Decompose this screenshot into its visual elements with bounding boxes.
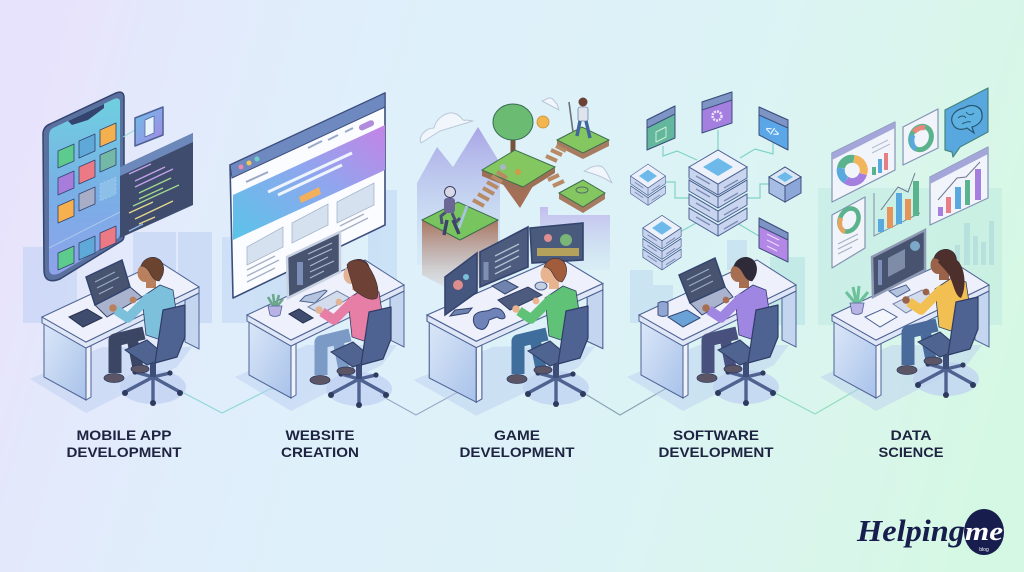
skyline right block bbox=[770, 257, 805, 325]
app icons bbox=[58, 123, 116, 270]
game controller bbox=[473, 308, 505, 329]
donut card bbox=[903, 109, 938, 165]
island: lower right bbox=[559, 180, 605, 213]
keyboard bbox=[893, 290, 935, 313]
panel: game development bbox=[414, 98, 612, 416]
skyline backdrop bbox=[540, 207, 610, 270]
panel: website creation bbox=[222, 93, 404, 411]
line and bar chart card bbox=[930, 147, 988, 225]
laptop bbox=[679, 258, 733, 315]
skyline backdrop bbox=[23, 232, 212, 323]
label: software development: SOFTWARE bbox=[673, 427, 759, 443]
report document bbox=[832, 197, 865, 268]
app tile icon bbox=[123, 107, 163, 146]
tablet bbox=[668, 310, 700, 327]
tree bbox=[493, 104, 533, 156]
window: settings bbox=[702, 92, 732, 133]
clouds bbox=[420, 98, 612, 183]
floating bar chart bbox=[874, 173, 920, 236]
speech bubble with brain bbox=[945, 88, 988, 157]
label: mobile app development: DEVELOPMENT bbox=[66, 444, 182, 460]
island: top right bbox=[557, 127, 609, 159]
keyboard and mouse bbox=[498, 282, 547, 310]
label: data science: SCIENCE bbox=[878, 444, 944, 460]
window: code bbox=[759, 107, 788, 150]
desk bbox=[414, 257, 603, 416]
panel: software development bbox=[627, 92, 805, 411]
small server top left bbox=[631, 164, 665, 205]
connector path between stations bbox=[182, 386, 862, 415]
skyline backdrop bbox=[818, 188, 1002, 325]
code window bbox=[120, 133, 193, 238]
laptop bbox=[86, 260, 142, 317]
small server lower left bbox=[643, 215, 681, 270]
window: code: </> bbox=[763, 124, 781, 140]
phone bbox=[43, 92, 124, 281]
ghost bar chart bbox=[955, 221, 994, 265]
skyline backdrop bbox=[630, 240, 747, 323]
skyline backdrop bbox=[222, 190, 397, 323]
monitor bbox=[872, 230, 925, 297]
logo: HelpingMe blog bbox=[856, 509, 1004, 555]
content cards bbox=[247, 183, 374, 265]
desk bbox=[235, 260, 404, 411]
triple monitors bbox=[445, 223, 583, 316]
label: game development: DEVELOPMENT bbox=[460, 444, 575, 460]
desk bbox=[30, 262, 199, 413]
coin bbox=[537, 116, 549, 128]
central server stack bbox=[689, 150, 747, 236]
island: centre bbox=[482, 150, 555, 208]
stairs bbox=[473, 146, 566, 206]
mug bbox=[658, 302, 668, 316]
label: data science bbox=[878, 427, 944, 460]
label: game development bbox=[460, 427, 575, 460]
desk bbox=[627, 260, 796, 411]
label: mobile app development bbox=[66, 427, 182, 460]
plant bbox=[268, 294, 283, 316]
label: software development bbox=[658, 427, 774, 460]
label: game development: GAME bbox=[494, 427, 540, 443]
person: yellow shirt with ponytail bbox=[897, 249, 979, 398]
window: folder bbox=[647, 106, 675, 150]
mountains bbox=[417, 127, 500, 265]
person: pink shirt with long hair bbox=[310, 259, 392, 408]
character: hero with staff bbox=[569, 98, 590, 138]
character: swordsman bbox=[441, 186, 467, 235]
logo: HelpingMe blog: blog bbox=[979, 547, 989, 553]
browser window bbox=[230, 93, 385, 298]
plant bbox=[846, 286, 868, 314]
hero band bbox=[233, 125, 385, 240]
label: mobile app development: MOBILE APP bbox=[76, 427, 172, 443]
logo: HelpingMe blog: me bbox=[965, 517, 1003, 546]
label: data science: DATA bbox=[890, 427, 932, 443]
label: website creation: CREATION bbox=[281, 444, 359, 460]
smartphone bbox=[289, 309, 313, 323]
panel: mobile app development bbox=[23, 92, 212, 413]
tablet bbox=[69, 309, 102, 327]
monitor bbox=[287, 232, 340, 303]
label: software development: DEVELOPMENT bbox=[658, 444, 774, 460]
dashboard card with donut and bars bbox=[832, 122, 895, 202]
desk bbox=[820, 260, 989, 411]
label: website creation: WEBSITE bbox=[286, 427, 354, 443]
person: purple shirt bbox=[697, 257, 779, 406]
window: list bbox=[759, 218, 788, 262]
single cube server bbox=[769, 167, 801, 202]
logo: HelpingMe blog: Helping bbox=[856, 513, 965, 548]
panel: data science bbox=[818, 88, 1002, 411]
person: green shirt bbox=[507, 258, 589, 407]
network connectors bbox=[663, 130, 773, 236]
label: website creation bbox=[281, 427, 359, 460]
person: light blue shirt bbox=[104, 257, 186, 406]
island: bottom left bbox=[422, 202, 498, 295]
notes paper bbox=[865, 309, 897, 327]
keyboard bbox=[308, 291, 350, 314]
